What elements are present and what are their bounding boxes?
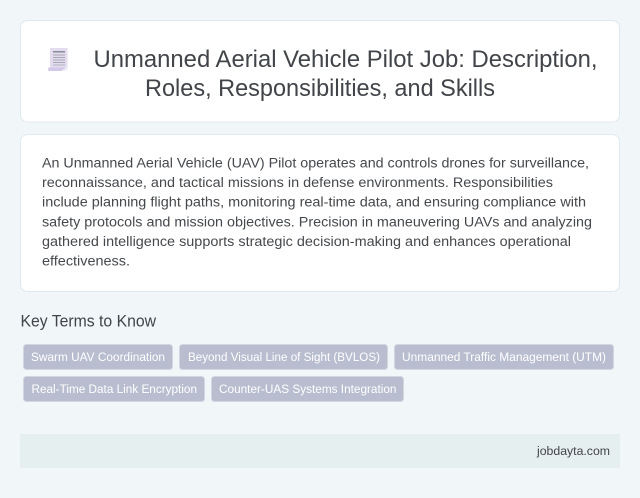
chip: swarm coordination <box>24 344 172 370</box>
text block: description: safety protocols and mission objectives. Precision in maneuvering UAVs and analyzing <box>42 214 592 230</box>
text block: description: gathered intelligence supports strategic decision-making and enhances operational <box>42 234 571 250</box>
title: Unmanned Aerial Vehicle Pilot Job: Description, <box>94 46 598 73</box>
chip: counter-UAS: Counter-UAS Systems Integration <box>219 382 396 396</box>
title: Roles, Responsibilities, and Skills <box>145 75 495 102</box>
text block: description: effectiveness. <box>42 254 130 270</box>
panel: description <box>20 134 620 292</box>
chip: swarm coordination: Swarm UAV Coordination <box>31 350 165 364</box>
title <box>94 46 598 102</box>
text block: description: An Unmanned Aerial Vehicle (UAV) Pilot operates and controls drones for surveillance, <box>42 156 589 172</box>
footer source text: jobdayta.com <box>536 444 610 458</box>
chip: BVLOS: Beyond Visual Line of Sight (BVLOS) <box>188 350 380 364</box>
chip: data link encryption <box>24 376 204 402</box>
chip: BVLOS <box>180 344 388 370</box>
text block: description: reconnaissance, and tactical missions in defense environments. Responsibilities <box>42 175 553 191</box>
text block: description <box>42 156 592 270</box>
panel: title card <box>20 20 620 122</box>
chip: counter-UAS <box>212 376 404 402</box>
chip: UTM <box>394 344 614 370</box>
chip: UTM: Unmanned Traffic Management (UTM) <box>402 350 606 364</box>
footer bar <box>20 434 620 468</box>
text block: description: include planning flight paths, monitoring real-time data, and ensuring compliance with <box>42 195 586 211</box>
icon: document scroll <box>48 48 68 71</box>
heading: key terms: Key Terms to Know <box>20 312 156 330</box>
chip: data link encryption: Real-Time Data Link Encryption <box>32 382 197 396</box>
chip list: key terms <box>24 344 614 402</box>
